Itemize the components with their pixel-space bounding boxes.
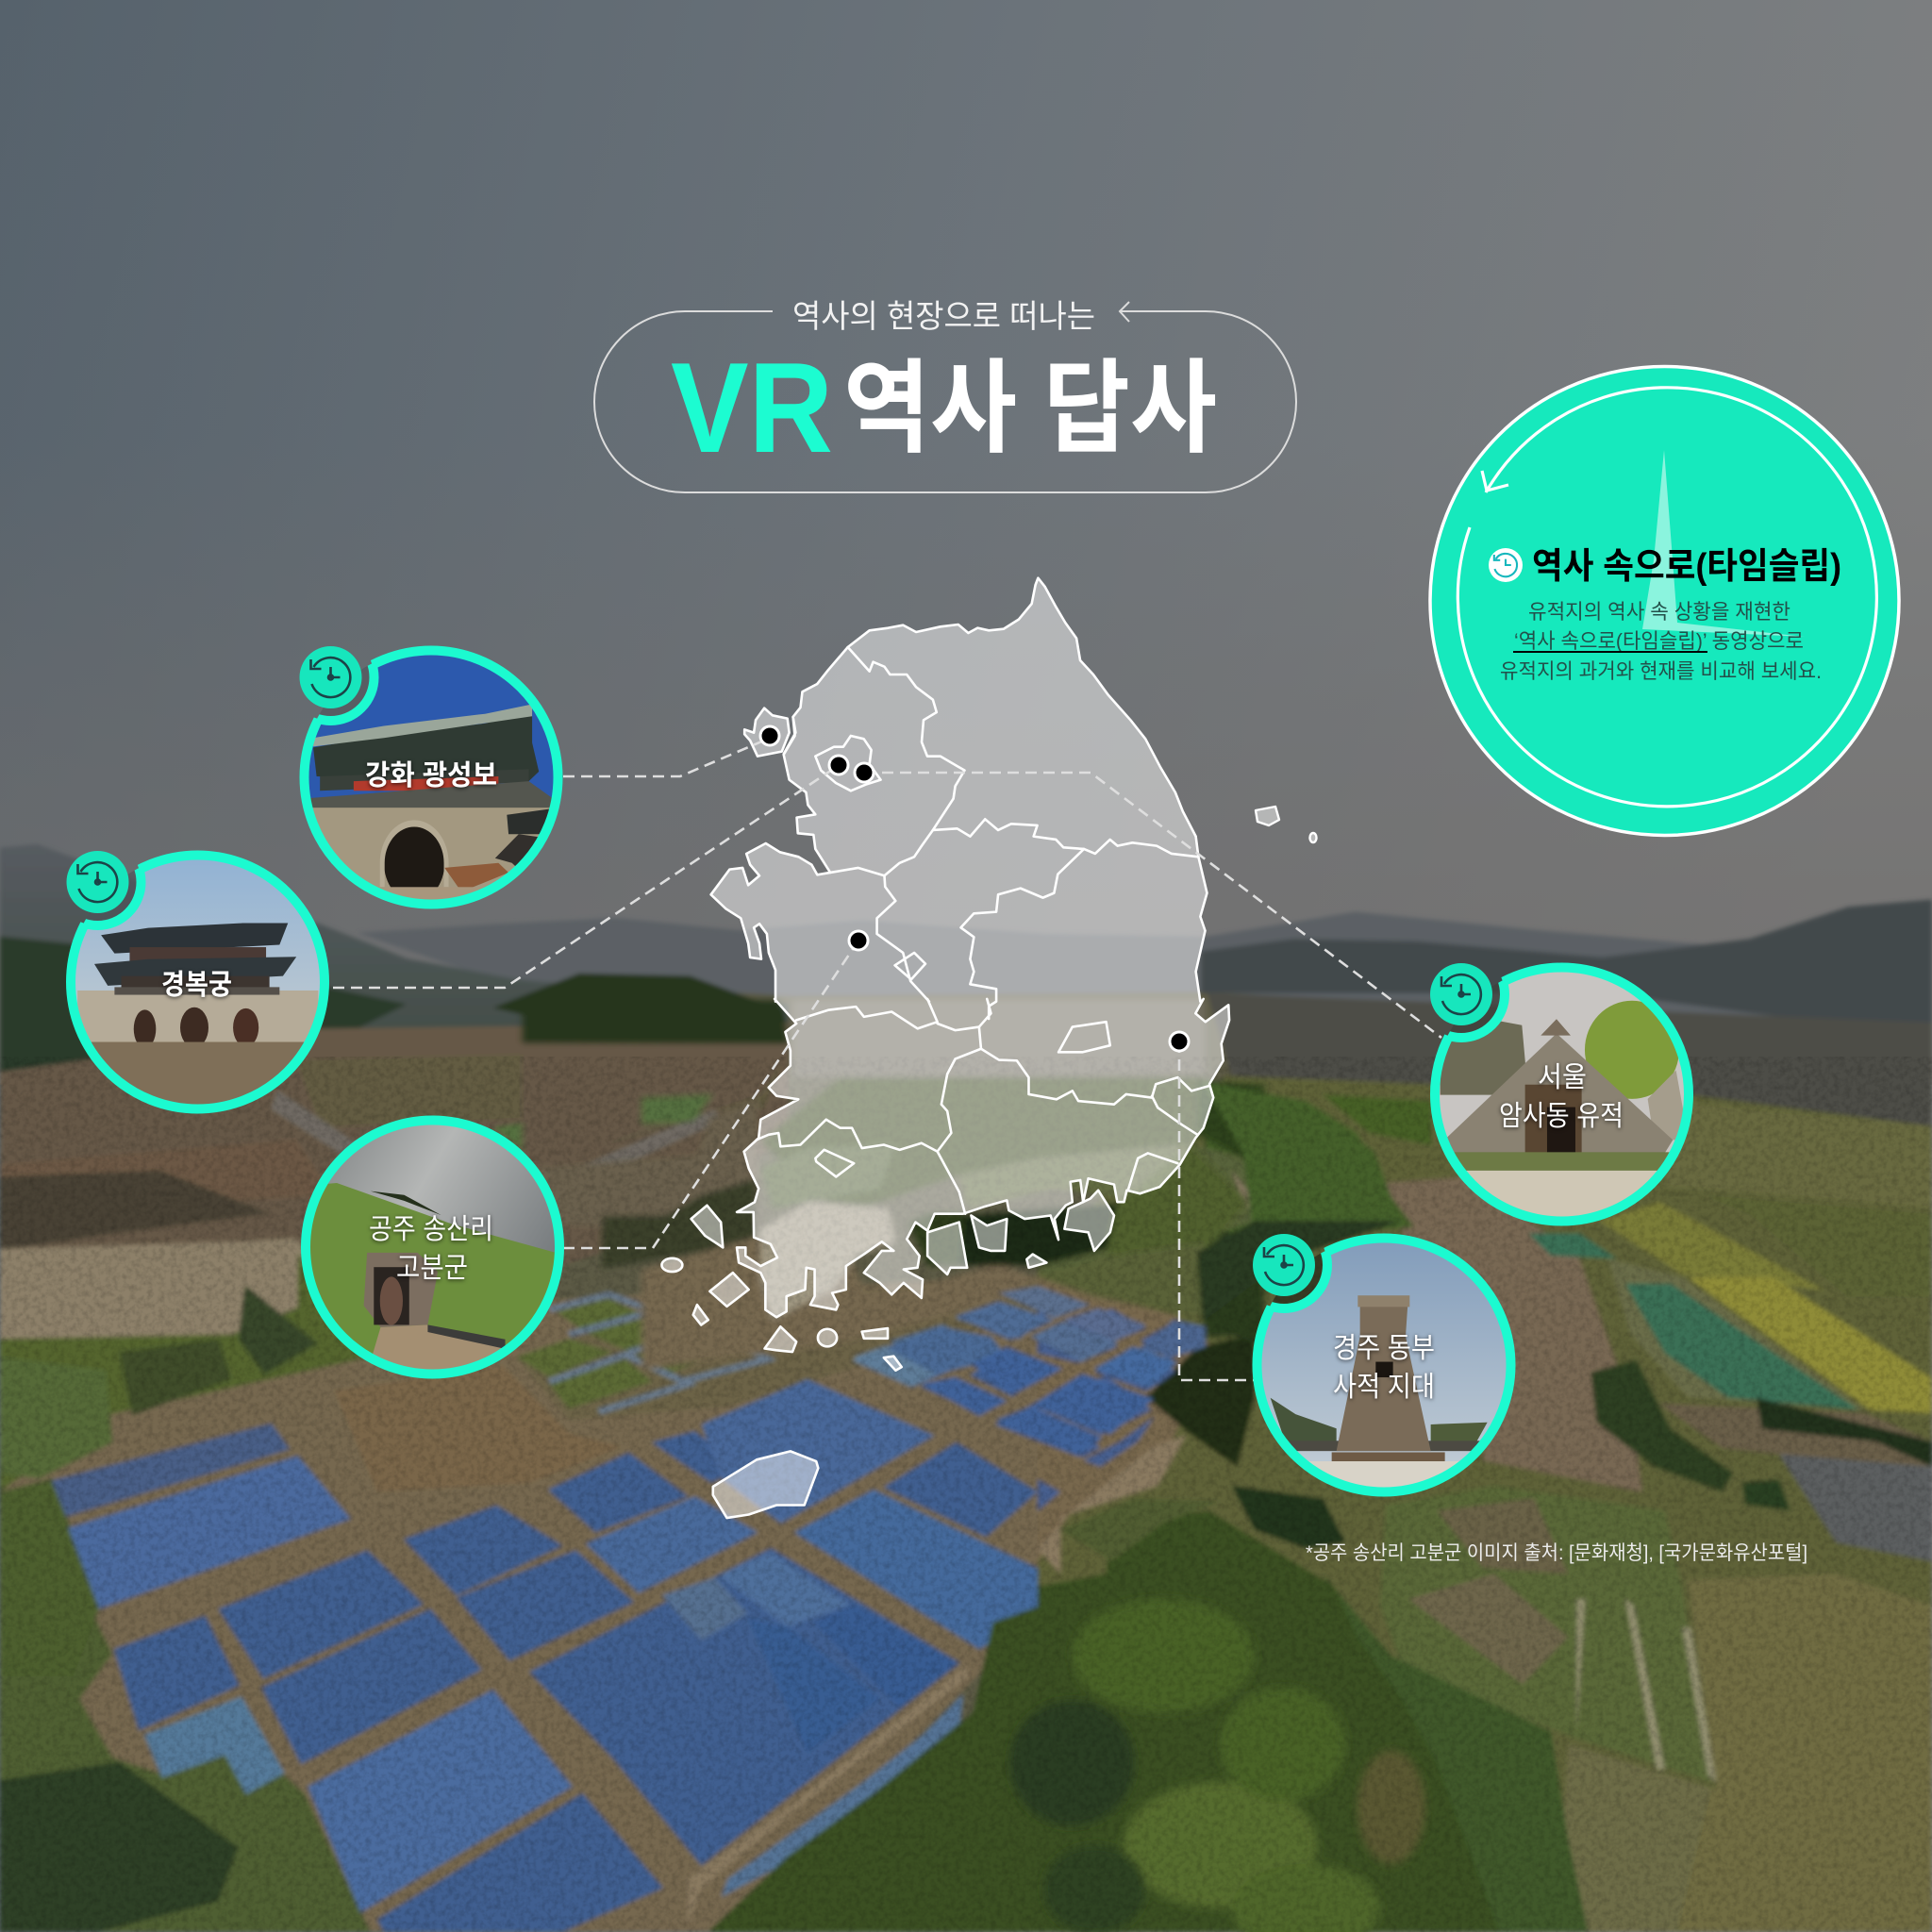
- soft tree canopy highlights: [1009, 1599, 1425, 1932]
- photo circle: 서울 암사동 유적: [1418, 951, 1695, 1230]
- callout: time slip explanation: [1430, 366, 1899, 836]
- ring: [306, 1121, 559, 1374]
- photo circle: 강화 광성보: [300, 645, 562, 909]
- map borders and islands, lower half: [661, 999, 1229, 1518]
- map land fill: [711, 578, 1229, 1317]
- photo circle: 서울 암사동 유적: 암사동 유적: [1499, 1101, 1624, 1132]
- callout body text: 유적지의 과거와 현재를 비교해 보세요.: [1500, 659, 1822, 683]
- label: 서울: [1538, 1062, 1587, 1093]
- callout heading: 역사 속으로(타임슬립): [1532, 547, 1841, 587]
- clock hands: [1642, 450, 1805, 637]
- terrain group: lower left, tarps: [0, 1240, 1038, 1932]
- badge ring detour: [83, 868, 145, 930]
- badge ring detour: [317, 664, 379, 725]
- trees over the lawn at right of the map: [1158, 1082, 1403, 1460]
- heading 역사 답사: 역사 답사: [843, 351, 1217, 465]
- terrain group: lower right, from crop coordinates: [1038, 1075, 1932, 1932]
- terrain group: tarps between map and Gyeongju circle: [1038, 1287, 1206, 1511]
- title: pill outline with subtitle and main heading: [594, 299, 1296, 492]
- circular arrow: [1457, 388, 1876, 807]
- photo circle: 경주 동부 사적 지대: [1241, 1222, 1522, 1500]
- heading VR: VR: [671, 336, 833, 479]
- icon: history clock badge: [1253, 1234, 1315, 1296]
- subtitle: 역사의 현장으로 떠나는: [792, 299, 1095, 335]
- icon: history clock: [1489, 548, 1523, 582]
- photo circle: 경주 동부 사적 지대: 사적 지대: [1333, 1372, 1435, 1403]
- photo circle: 경복궁: [55, 839, 333, 1114]
- title outline pill with arrow: [594, 302, 1296, 492]
- map borders, upper half: [711, 578, 1207, 1019]
- callout disc: [1430, 366, 1899, 836]
- label: 공주 송산리: [369, 1214, 493, 1245]
- icon: history clock badge: [1430, 963, 1492, 1025]
- callout body text: 유적지의 역사 속 상황을 재현한: [1528, 600, 1790, 624]
- dashed connector lines: [333, 740, 1441, 1380]
- map of South Korea: [661, 578, 1317, 1518]
- icon: history clock badge: [300, 646, 362, 708]
- icon: history clock badge: [66, 851, 128, 913]
- underline: [1513, 651, 1707, 653]
- badge ring detour: [1241, 1222, 1327, 1308]
- label: 강화 광성보: [365, 760, 497, 791]
- label: 경복궁: [161, 970, 232, 1001]
- source footnote: *공주 송산리 고분군 이미지 출처: [문화재청], [국가문화유산포털]: [1306, 1542, 1807, 1564]
- Ulleungdo and Dokdo: [1256, 807, 1317, 842]
- photo circle: 공주 송산리 고분군: [300, 1113, 569, 1383]
- label: 경주 동부: [1333, 1333, 1435, 1364]
- callout body text: [1500, 600, 1822, 683]
- photo circle: 공주 송산리 고분군: 고분군: [396, 1253, 468, 1284]
- callout body text: ‘역사 속으로(타임슬립)’ 동영상으로: [1514, 629, 1804, 653]
- terrain group: ground under map: [523, 1000, 1264, 1371]
- location dots: [760, 726, 1189, 1051]
- badge ring detour: [1418, 951, 1505, 1038]
